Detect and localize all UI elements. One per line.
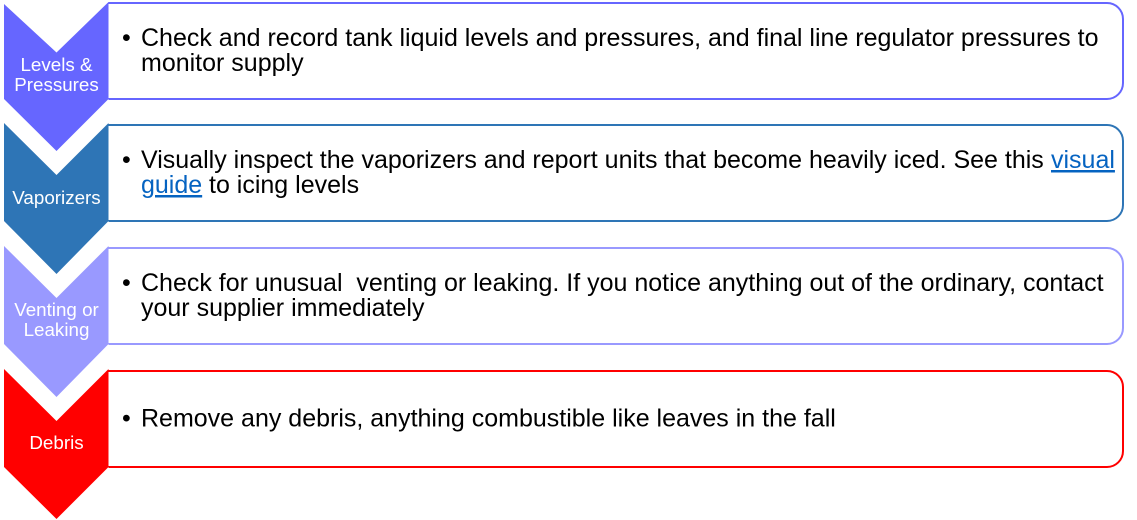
bullet text with link: visual xyxy=(1051,146,1115,174)
panel: debris xyxy=(4,369,1123,519)
bullet text: • xyxy=(122,404,131,432)
panel: venting or leaking xyxy=(4,246,1123,397)
bullet text: your supplier immediately xyxy=(141,294,425,322)
chevron xyxy=(4,123,108,274)
bullet text: Check for unusual venting or leaking. If you notice anything out of the ordinary, contact xyxy=(141,269,1104,297)
bullet text: Check and record tank liquid levels and pressures, and final line regulator pressures to xyxy=(141,24,1098,52)
text box outline xyxy=(108,3,1123,99)
chevron xyxy=(4,2,108,151)
bullet text: • xyxy=(122,24,131,52)
chevron xyxy=(4,369,108,519)
chevron label: Venting or xyxy=(14,299,99,320)
bullet text with link: Visually inspect the vaporizers and report units that become heavily iced. See this xyxy=(141,146,1044,174)
bullet text with link: guide xyxy=(141,171,202,199)
chevron label: Levels & xyxy=(20,54,93,75)
chevron label: Vaporizers xyxy=(12,187,101,208)
bullet text: • xyxy=(122,269,131,297)
bullet text with link: to icing levels xyxy=(209,171,359,199)
text box outline xyxy=(108,371,1123,467)
panel: vaporizers xyxy=(4,123,1123,274)
bullet text with link: • xyxy=(122,146,131,174)
chevron label: Pressures xyxy=(14,74,99,95)
panel: levels and pressures xyxy=(4,2,1123,151)
chevron xyxy=(4,246,108,397)
text box outline xyxy=(108,125,1123,221)
chevron label: Leaking xyxy=(24,319,89,340)
bullet text: monitor supply xyxy=(141,49,304,77)
bullet text: Remove any debris, anything combustible like leaves in the fall xyxy=(141,404,836,432)
text box outline xyxy=(108,248,1123,344)
chevron label: Debris xyxy=(29,432,84,453)
